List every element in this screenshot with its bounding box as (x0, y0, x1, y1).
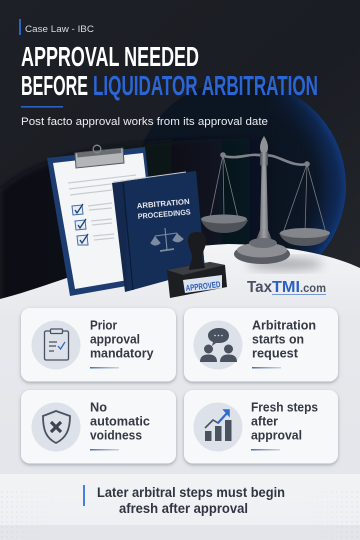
icon: clipboard checklist (44, 329, 68, 360)
icon: rising bar chart (205, 410, 232, 441)
card text: No (90, 400, 107, 414)
footer text: Later arbitral steps must begin (97, 485, 285, 500)
category tag (19, 19, 94, 35)
card text: mandatory (90, 346, 154, 360)
footer text: afresh after approval (119, 501, 248, 516)
title rule (21, 106, 63, 108)
book title: ARBITRATION (136, 197, 190, 210)
card text: request (252, 346, 299, 360)
light floor (0, 244, 360, 540)
title: APPROVAL NEEDED (21, 41, 199, 72)
card text (251, 400, 318, 442)
card text: after (251, 414, 278, 428)
illustration: approved stamp (167, 232, 227, 298)
footer accent bar (83, 485, 85, 506)
book title (136, 197, 191, 221)
card text: Prior (90, 318, 117, 332)
icon: people talking (200, 328, 237, 362)
card text: Arbitration (252, 318, 316, 332)
icon: check marks (75, 204, 88, 243)
card: fresh steps after approval (184, 390, 338, 464)
card: arbitration starts on request (184, 308, 338, 382)
logo: TaxTMI.com: Tax (247, 279, 272, 296)
logo: TaxTMI.com: TMI (272, 279, 300, 296)
logo: TaxTMI.com: .com (300, 283, 326, 295)
book title: PROCEEDINGS (137, 207, 191, 221)
blue glow rim (272, 85, 346, 255)
left dark shade (0, 138, 280, 310)
card text: approval (251, 428, 302, 442)
card text: voidness (90, 428, 142, 442)
title: BEFORE (21, 70, 88, 101)
footer text (97, 485, 285, 516)
icon: book scale emblem (151, 228, 183, 251)
card text: automatic (90, 414, 150, 428)
subtitle: Post facto approval works from its approval date (21, 116, 268, 128)
card: prior approval mandatory (21, 308, 176, 382)
illustration: book (112, 171, 205, 292)
dark circle behind scales (134, 80, 346, 292)
category tag: Case Law - IBC (25, 24, 94, 35)
card text (252, 318, 316, 360)
card text: starts on (252, 332, 304, 346)
footer band (0, 474, 360, 525)
footer dot texture (0, 490, 360, 540)
stamp label: APPROVED (185, 279, 221, 293)
card text (90, 318, 154, 360)
title (21, 41, 318, 101)
logo: TaxTMI.com (247, 279, 326, 296)
card text: Fresh steps (251, 400, 318, 414)
icon: shield with x (43, 411, 70, 443)
illustration: clipboard (47, 145, 160, 296)
card text (90, 400, 150, 442)
card text: approval (90, 332, 140, 346)
checkboxes (72, 205, 88, 245)
dark background (0, 0, 360, 320)
card: no automatic voidness (21, 390, 176, 464)
illustration: scales of justice (201, 136, 330, 270)
